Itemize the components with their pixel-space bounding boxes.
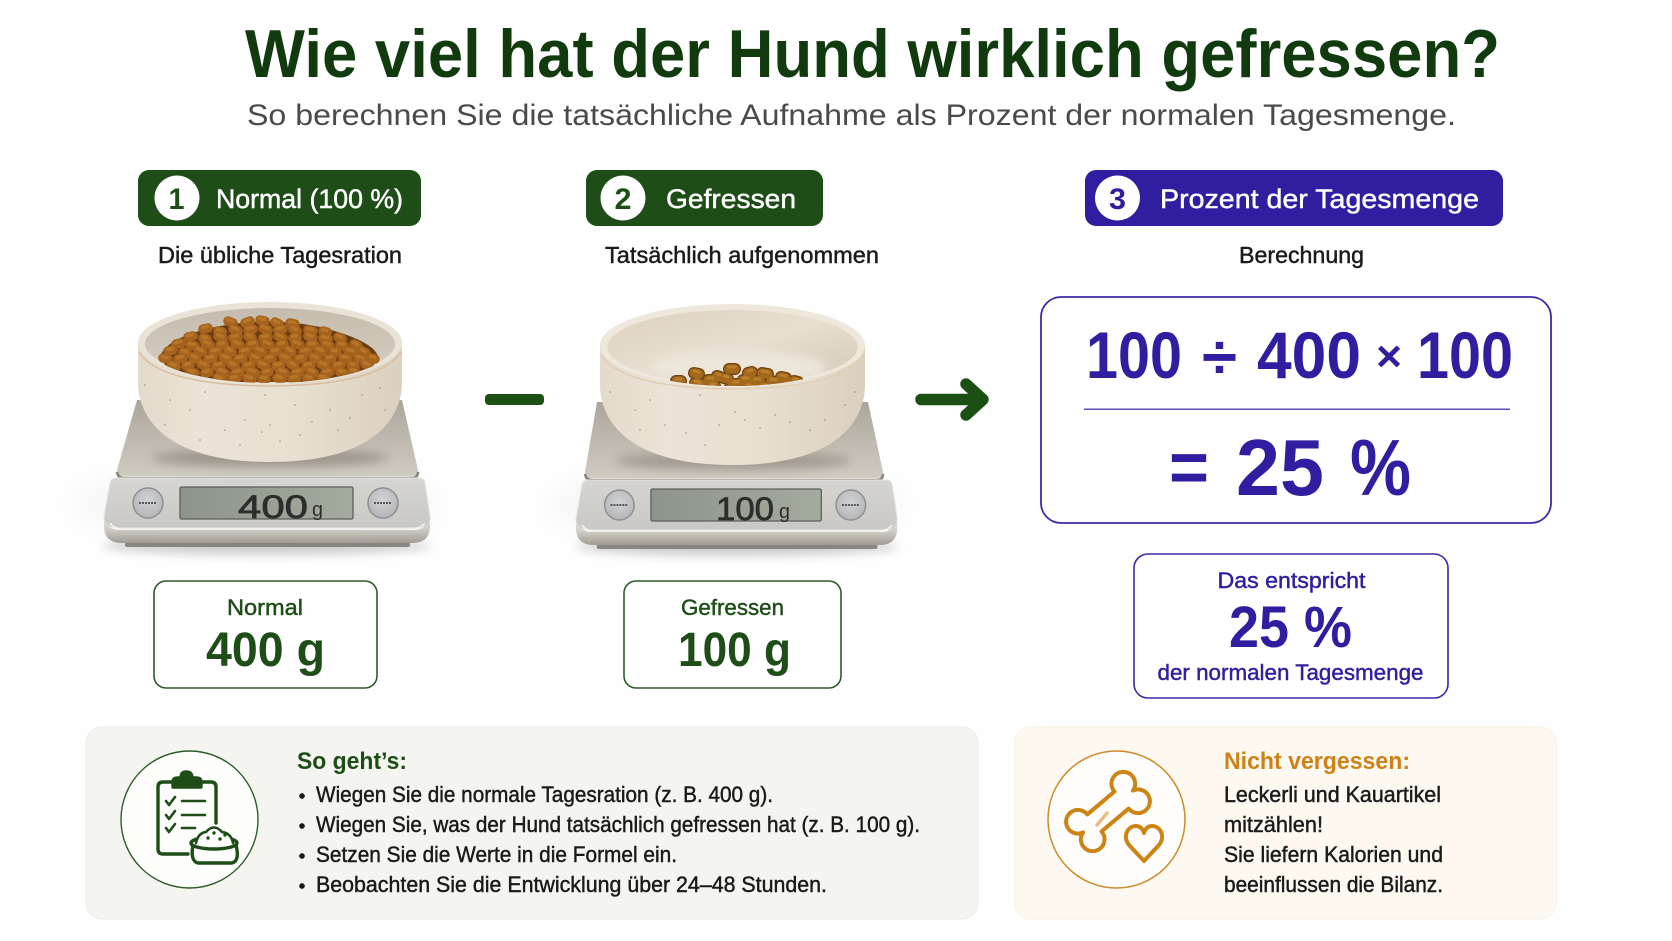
photo: bowl full on scale reading 400 g: g bbox=[312, 499, 323, 521]
value box: eaten: 100 g bbox=[678, 624, 791, 677]
photo: bowl with little food on scale reading 100 g: g bbox=[779, 501, 790, 523]
formula box: 100 bbox=[1417, 318, 1513, 392]
formula box: ÷ bbox=[1202, 323, 1237, 392]
panel: reminder bbox=[1014, 727, 1556, 919]
bullet list: Wiegen Sie, was der Hund tatsächlich gefressen hat (z. B. 100 g). bbox=[316, 812, 920, 837]
value box: normal: Normal bbox=[227, 595, 303, 620]
step 3 badge bbox=[1085, 170, 1503, 226]
note text: beeinflussen die Bilanz. bbox=[1224, 872, 1443, 897]
bullet list bbox=[299, 782, 920, 897]
formula box: 100 bbox=[1086, 318, 1182, 392]
result box: Das entspricht bbox=[1218, 568, 1366, 593]
note text: Sie liefern Kalorien und bbox=[1224, 842, 1443, 867]
note text bbox=[1224, 782, 1443, 897]
value box: eaten: Gefressen bbox=[681, 595, 784, 620]
note text: mitzählen! bbox=[1224, 812, 1323, 837]
step 2 badge: 2 bbox=[614, 183, 632, 216]
value box: normal bbox=[154, 581, 377, 688]
photo: bowl with little food on scale reading 100 g bbox=[545, 304, 905, 556]
heading: So geht’s: bbox=[297, 748, 407, 775]
value box: normal: 400 g bbox=[206, 624, 325, 677]
subtitle: So berechnen Sie die tatsächliche Aufnahme als Prozent der normalen Tagesmenge. bbox=[247, 99, 1456, 132]
operator: minus bbox=[485, 394, 544, 405]
icon: clipboard with food bowl bbox=[121, 751, 258, 888]
step 2 badge: Gefressen bbox=[666, 184, 796, 214]
step 3 badge: 3 bbox=[1109, 183, 1126, 216]
step 1 caption: Die übliche Tagesration bbox=[158, 242, 402, 268]
formula box: % bbox=[1350, 423, 1411, 512]
formula box: = bbox=[1169, 428, 1209, 508]
result box bbox=[1134, 554, 1448, 698]
note text: Leckerli und Kauartikel bbox=[1224, 782, 1441, 807]
formula box: × bbox=[1376, 332, 1402, 381]
bullet list: Beobachten Sie die Entwicklung über 24–48 Stunden. bbox=[316, 872, 827, 897]
result box: der normalen Tagesmenge bbox=[1158, 660, 1424, 685]
heading: Nicht vergessen: bbox=[1224, 748, 1410, 775]
formula box bbox=[1041, 297, 1551, 523]
formula box: 25 bbox=[1236, 423, 1324, 512]
title: Wie viel hat der Hund wirklich gefressen? bbox=[245, 16, 1500, 92]
step 2 badge bbox=[586, 170, 823, 226]
step 2 caption: Tatsächlich aufgenommen bbox=[605, 242, 879, 268]
step 1 badge: 1 bbox=[168, 183, 184, 216]
formula box: 400 bbox=[1257, 318, 1361, 392]
photo: bowl full on scale reading 400 g: 400 bbox=[238, 489, 308, 525]
bullet list: Setzen Sie die Werte in die Formel ein. bbox=[316, 842, 677, 867]
step 3 caption: Berechnung bbox=[1239, 242, 1364, 268]
step 1 badge: Normal (100 %) bbox=[216, 184, 403, 214]
result box: 25 % bbox=[1229, 595, 1352, 660]
icon: bone and heart bbox=[1048, 751, 1185, 888]
step 1 badge bbox=[138, 170, 421, 226]
photo: bowl full on scale reading 400 g bbox=[70, 302, 440, 555]
value box: eaten bbox=[624, 581, 841, 688]
arrow: result bbox=[921, 384, 983, 415]
photo: bowl with little food on scale reading 100 g: 100 bbox=[716, 491, 774, 527]
step 3 badge: Prozent der Tagesmenge bbox=[1160, 184, 1479, 214]
panel: how-to bbox=[86, 727, 978, 919]
bullet list: Wiegen Sie die normale Tagesration (z. B. 400 g). bbox=[316, 782, 773, 807]
